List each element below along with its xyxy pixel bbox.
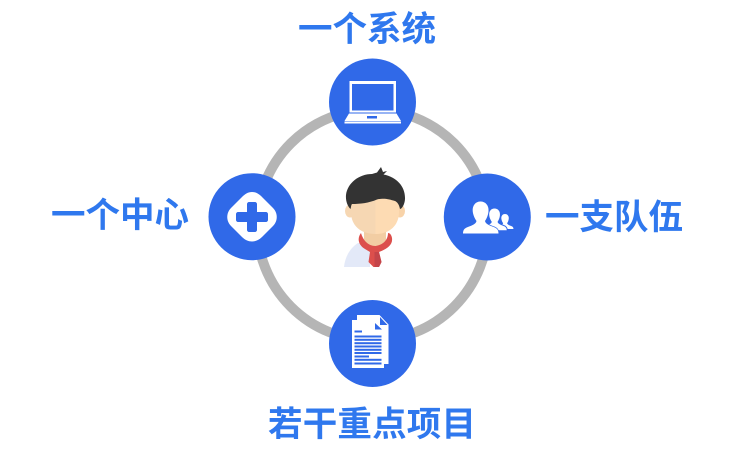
node: team icon [444,174,531,260]
node: document icon [329,300,416,387]
neck [364,226,386,246]
shirt [344,243,370,267]
ring connecting the four nodes [257,110,488,340]
face [351,200,376,234]
heading: bottom label: 若干重点项目 [268,406,476,444]
node: medical cross icon [208,173,296,260]
central person illustration [344,167,405,267]
red scarf [359,233,392,267]
heading: left label: 一个中心 [51,197,189,235]
heading: right label: 一支队伍 [545,199,683,237]
heading: top label: 一个系统 [298,11,436,49]
node: laptop icon [329,58,416,146]
hair [346,167,405,209]
ears [345,204,355,218]
